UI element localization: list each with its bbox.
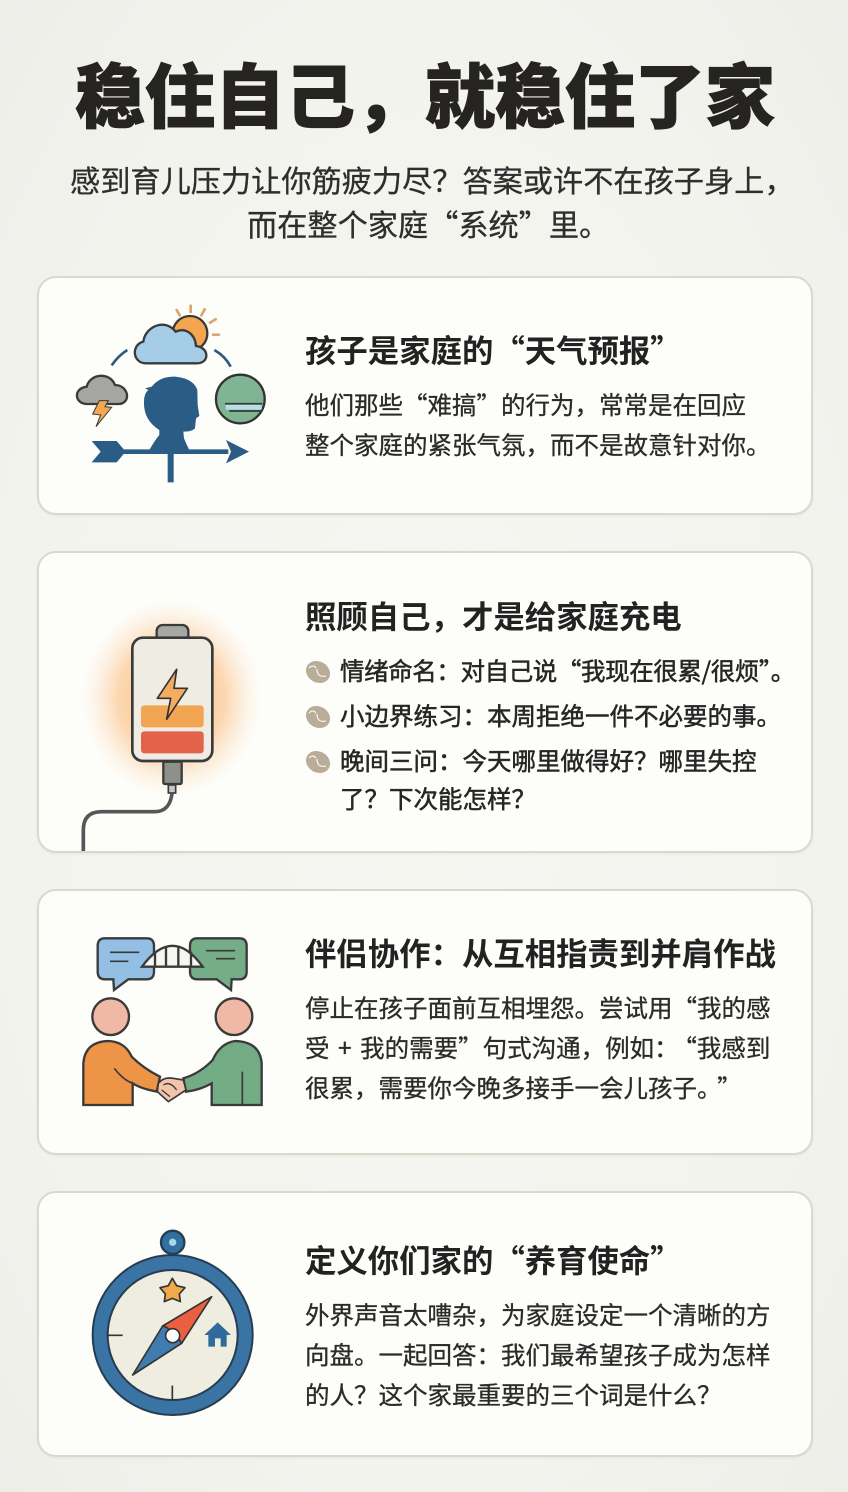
text block: 受 + 我的需要”句式沟通，例如：“我感到 [305, 1030, 770, 1065]
subtitle: 而在整个家庭“系统”里。 [247, 201, 609, 245]
text block: 的人？这个家最重要的三个词是什么？ [305, 1377, 722, 1412]
text: 了？下次能怎样？ [340, 781, 536, 816]
text block [305, 387, 770, 462]
list item [306, 698, 781, 733]
icon: charging battery [82, 608, 255, 851]
text block [305, 990, 770, 1105]
heading: 定义你们家的“养育使命” [305, 1237, 682, 1282]
text: 晚间三问：今天哪里做得好？哪里失控 [340, 743, 756, 778]
heading: 孩子是家庭的“天气预报” [305, 327, 682, 372]
icon: weather vane child [76, 304, 266, 482]
panel: weather forecast [37, 276, 813, 515]
text [340, 743, 756, 816]
text block: 向盘。一起回答：我们最希望孩子成为怎样 [305, 1337, 770, 1372]
panel: self care [37, 551, 813, 853]
text: 情绪命名：对自己说“我现在很累/很烦”。 [340, 653, 795, 688]
heading: 伴侣协作：从互相指责到并肩作战 [305, 930, 776, 975]
text block: 他们那些“难搞”的行为，常常是在回应 [305, 387, 746, 422]
icon: partners handshake [82, 937, 263, 1106]
list item [306, 743, 756, 816]
text block: 外界声音太嘈杂，为家庭设定一个清晰的方 [305, 1297, 770, 1332]
list item [306, 653, 795, 688]
heading: 照顾自己，才是给家庭充电 [305, 593, 682, 638]
subtitle: 感到育儿压力让你筋疲力尽？答案或许不在孩子身上， [70, 157, 795, 201]
text block: 停止在孩子面前互相埋怨。尝试用“我的感 [305, 990, 770, 1025]
subtitle [70, 157, 795, 245]
text block [305, 1297, 770, 1412]
panel: parenting mission [37, 1191, 813, 1457]
text block: 很累，需要你今晚多接手一会儿孩子。 ” [305, 1070, 742, 1105]
panel: partner collaboration [37, 889, 813, 1155]
icon: bullet [306, 706, 330, 728]
icon: bullet [306, 751, 330, 773]
text block: 整个家庭的紧张气氛，而不是故意针对你。 [305, 427, 770, 462]
title: 稳住自己，就稳住了家 [75, 42, 775, 143]
text: 小边界练习：本周拒绝一件不必要的事。 [340, 698, 781, 733]
icon: bullet [306, 661, 330, 683]
icon: compass [92, 1230, 254, 1416]
